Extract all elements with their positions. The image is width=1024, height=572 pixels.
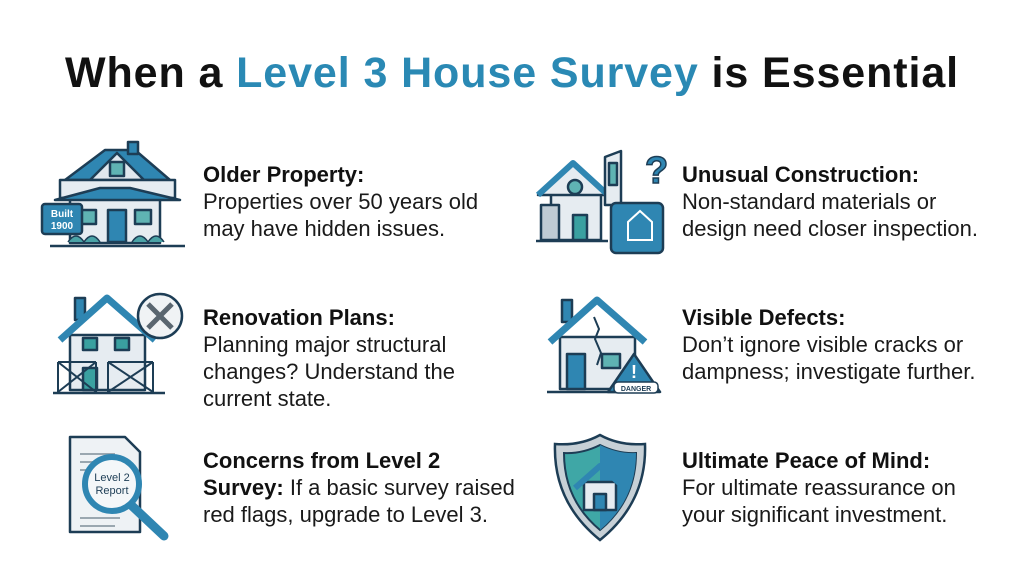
text: renovation plans: Planning major structural bbox=[203, 332, 446, 357]
text: peace of mind: your significant investment. bbox=[682, 502, 947, 527]
text: level 2 concerns bbox=[203, 448, 515, 527]
text: visible defects bbox=[682, 305, 976, 384]
text: unusual construction bbox=[682, 162, 978, 241]
icon: old house: 1900 bbox=[51, 221, 74, 232]
text: visible defects: Visible Defects: bbox=[682, 305, 845, 330]
icon: renovation bbox=[53, 292, 184, 394]
text: unusual construction: Non-standard materials or bbox=[682, 189, 936, 214]
text: older property: may have hidden issues. bbox=[203, 216, 445, 241]
text: level 2 concerns: Concerns from Level 2 bbox=[203, 448, 440, 473]
text: renovation plans: current state. bbox=[203, 386, 331, 411]
text: older property: Older Property: bbox=[203, 162, 364, 187]
icon: old house: Built bbox=[51, 209, 74, 220]
text: peace of mind: Ultimate Peace of Mind: bbox=[682, 448, 930, 473]
icon: level 2 report: Report bbox=[95, 485, 129, 497]
text: renovation plans: changes? Understand the bbox=[203, 359, 455, 384]
text: unusual construction: Unusual Construction: bbox=[682, 162, 919, 187]
text: renovation plans: Renovation Plans: bbox=[203, 305, 395, 330]
icon: visible defects bbox=[547, 296, 662, 394]
text: renovation plans bbox=[203, 305, 455, 411]
text: level 2 concerns: Survey: If a basic survey raised bbox=[203, 475, 515, 500]
icon: unusual construction: ? bbox=[645, 150, 668, 192]
title: When a Level 3 House Survey is Essential bbox=[65, 49, 959, 97]
text: older property: Properties over 50 years old bbox=[203, 189, 478, 214]
text: peace of mind: For ultimate reassurance on bbox=[682, 475, 956, 500]
icon: unusual construction bbox=[536, 150, 668, 254]
text: unusual construction: design need closer inspection. bbox=[682, 216, 978, 241]
text: level 2 concerns: red flags, upgrade to Level 3. bbox=[203, 502, 488, 527]
icon: shield bbox=[554, 434, 646, 542]
text: visible defects: Don’t ignore visible cracks or bbox=[682, 332, 963, 357]
text: older property bbox=[203, 162, 478, 241]
icon: visible defects: ! bbox=[631, 362, 637, 382]
icon: old house bbox=[40, 140, 185, 248]
text: visible defects: dampness; investigate further. bbox=[682, 359, 976, 384]
icon: level 2 report: Level 2 bbox=[94, 472, 130, 484]
text: peace of mind bbox=[682, 448, 956, 527]
icon: visible defects: DANGER bbox=[621, 386, 651, 393]
icon: level 2 report bbox=[68, 436, 168, 540]
